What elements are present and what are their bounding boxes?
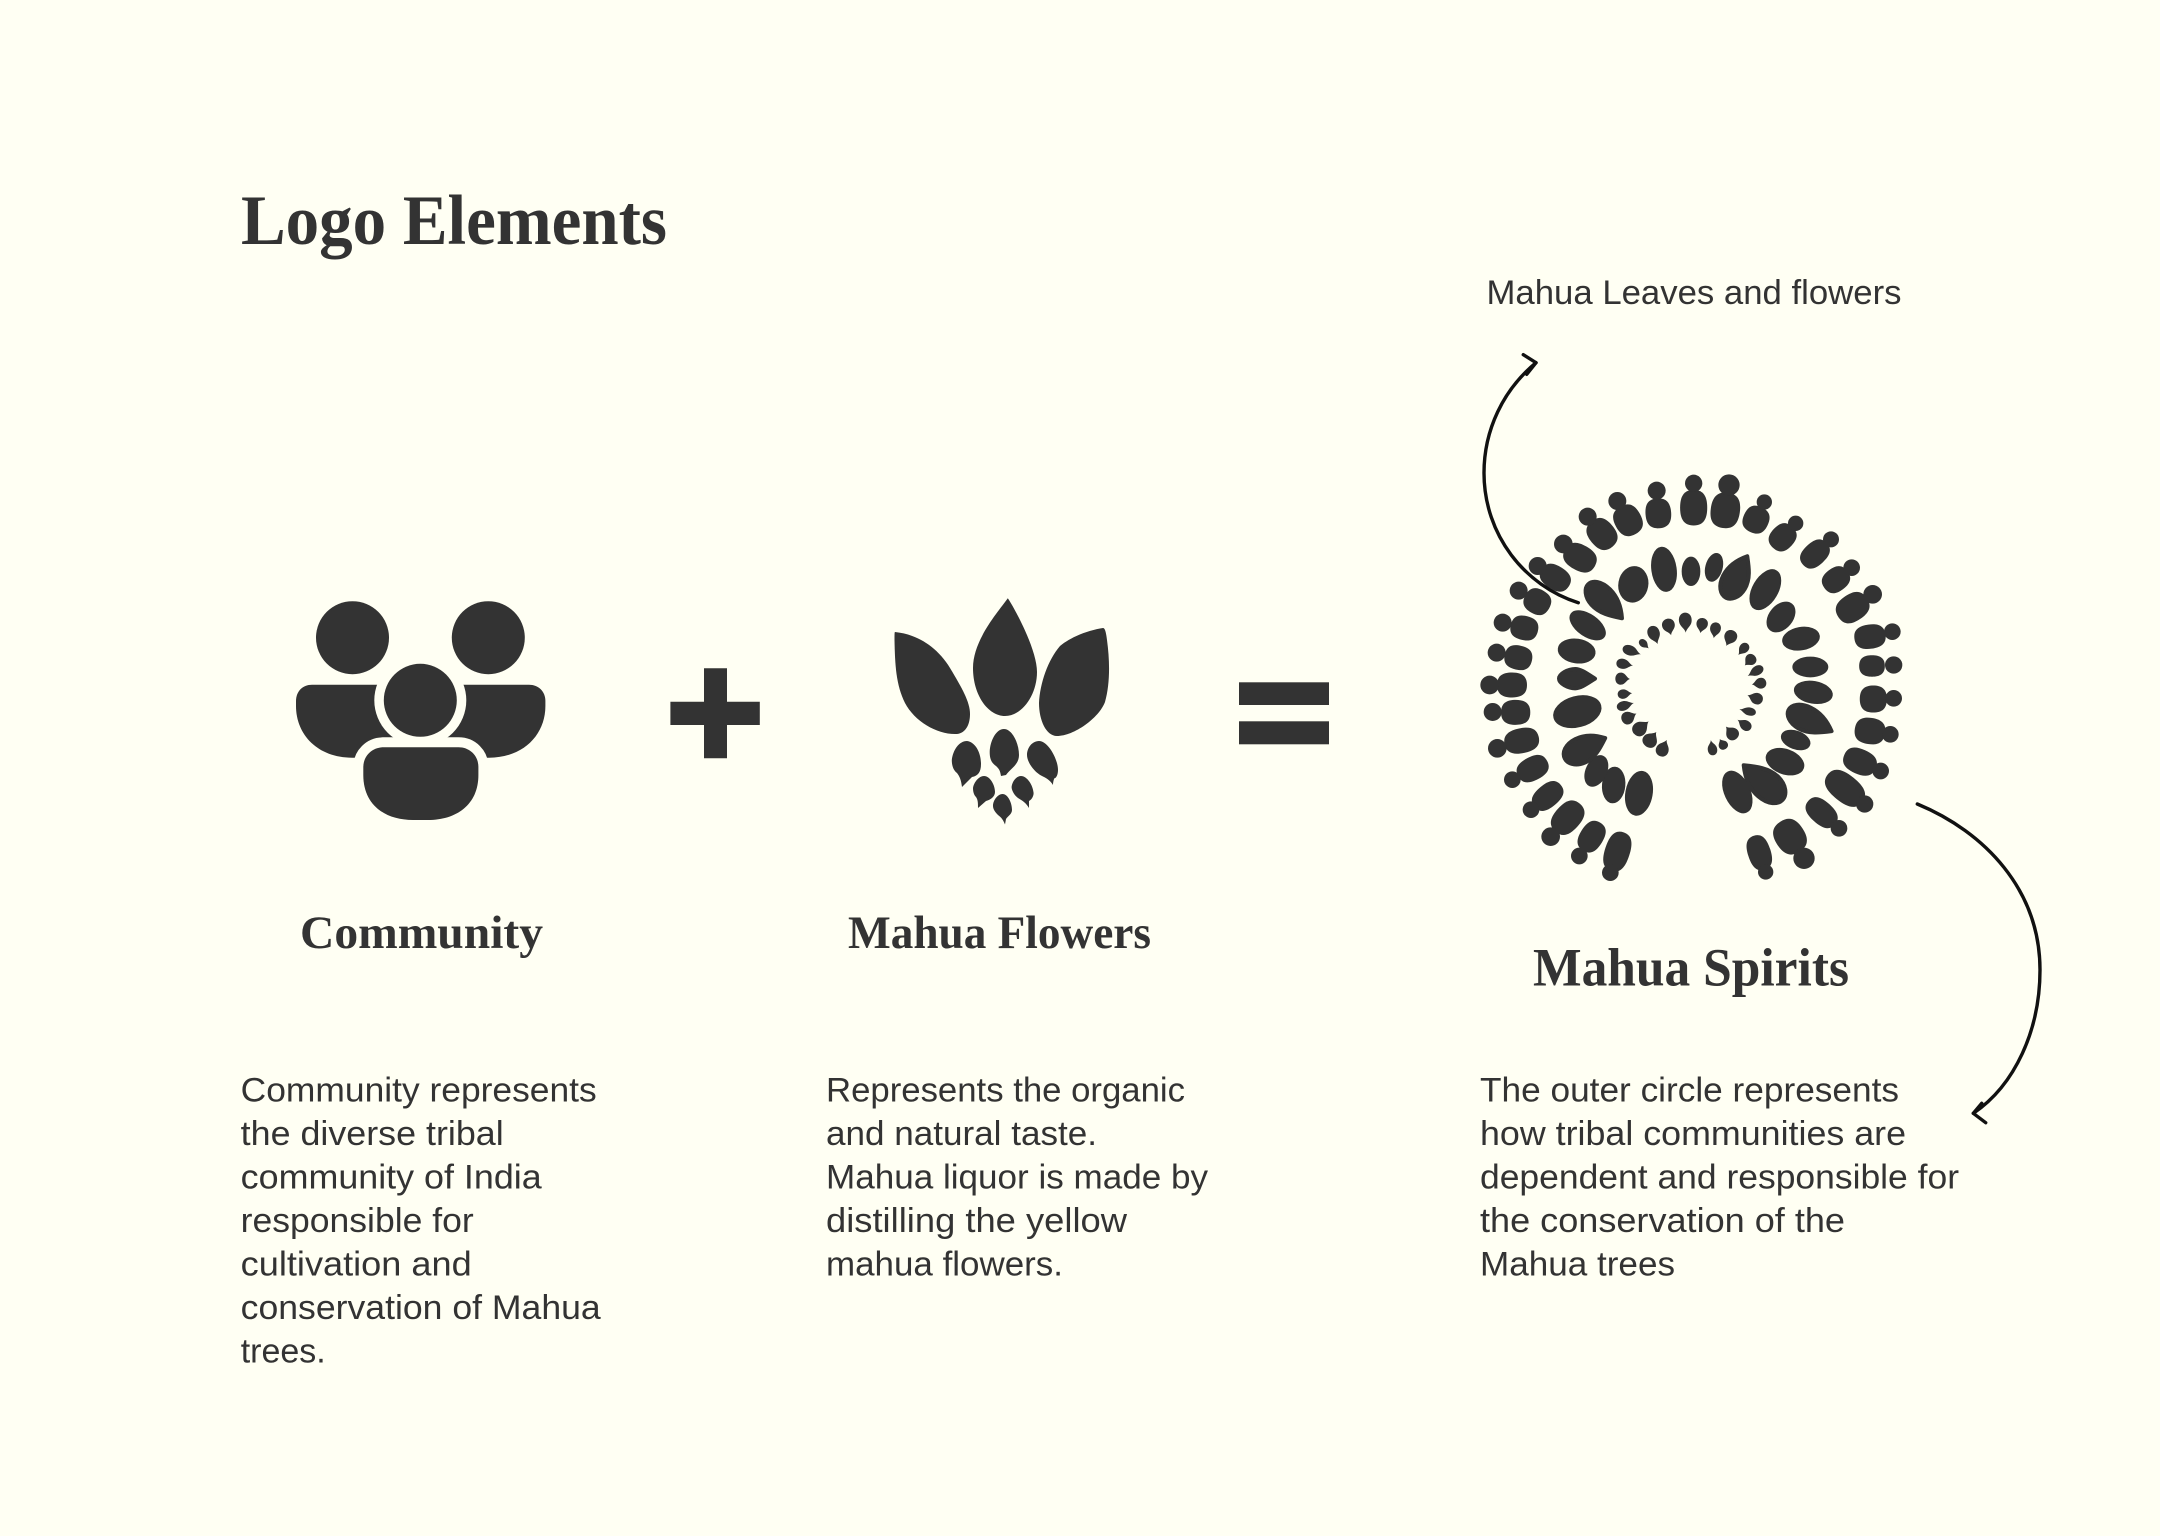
icon: community [296, 601, 545, 820]
arrow: to outer circle description [1917, 804, 2040, 1123]
heading: mahua flowers: Mahua Flowers [848, 907, 1151, 959]
text block: mahua spirits description: dependent and responsible for [1480, 1159, 1959, 1197]
heading: community: Community [300, 907, 544, 959]
text block: community description: the diverse tribal [241, 1115, 504, 1153]
text block: community description [241, 1072, 602, 1371]
text block: mahua spirits description [1480, 1072, 1959, 1284]
text block: mahua flowers description: mahua flowers. [826, 1246, 1063, 1284]
text block: mahua flowers description [826, 1072, 1209, 1284]
arrow: to leaves and flowers caption [1484, 355, 1578, 603]
text block: mahua spirits description: The outer circle represents [1480, 1072, 1899, 1110]
text block: mahua spirits description: how tribal communities are [1480, 1115, 1906, 1153]
logo: mahua spirits emblem [1480, 474, 1902, 881]
text block: mahua flowers description: distilling the yellow [826, 1202, 1127, 1240]
outer ring: people [1480, 474, 1902, 881]
caption: leaves and flowers: Mahua Leaves and flowers [1486, 274, 1902, 312]
middle ring: leaves [1550, 546, 1837, 817]
text block: community description: cultivation and [241, 1246, 472, 1284]
text block: community description: community of India [241, 1159, 543, 1197]
text block: mahua flowers description: Mahua liquor is made by [826, 1159, 1209, 1197]
title: Logo Elements [241, 182, 667, 260]
text block: mahua spirits description: the conservation of the [1480, 1202, 1845, 1240]
text block: community description: trees. [241, 1333, 326, 1371]
inner ring: flowers [1615, 612, 1767, 759]
icon: plus [670, 668, 760, 758]
text block: community description: conservation of Mahua [241, 1289, 602, 1327]
text block: community description: Community represents [241, 1072, 597, 1110]
text block: mahua flowers description: Represents the organic [826, 1072, 1185, 1110]
heading: mahua spirits: Mahua Spirits [1533, 938, 1849, 998]
icon: mahua flower [894, 598, 1109, 824]
text block: mahua spirits description: Mahua trees [1480, 1246, 1675, 1284]
text block: mahua flowers description: and natural taste. [826, 1115, 1097, 1153]
text block: community description: responsible for [241, 1202, 474, 1240]
icon: equals [1239, 682, 1329, 744]
